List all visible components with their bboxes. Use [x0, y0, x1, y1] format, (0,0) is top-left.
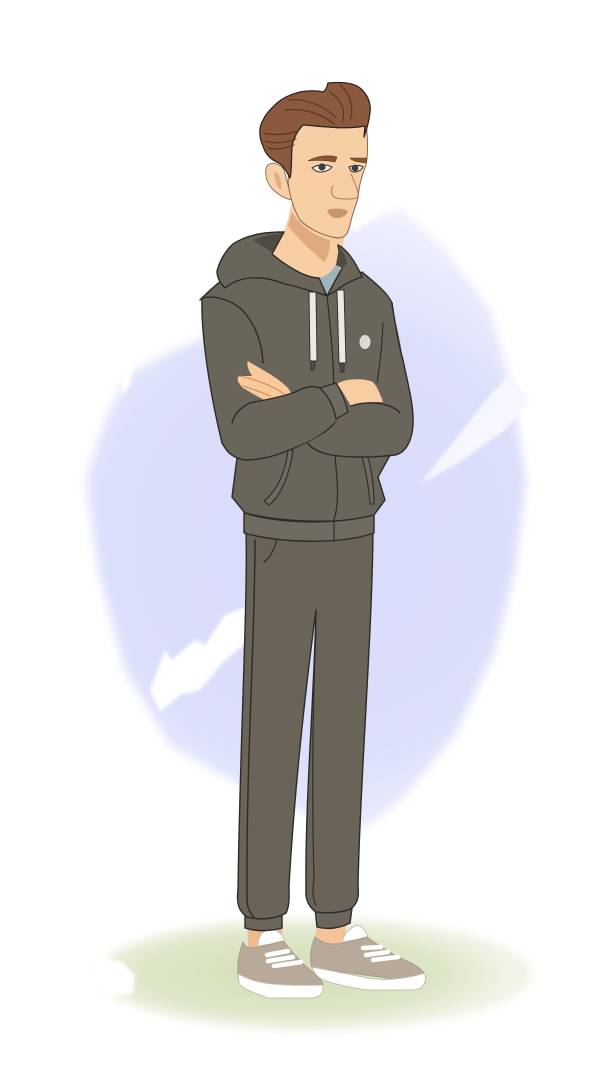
trousers — [237, 530, 373, 931]
ground: green grass patch — [92, 918, 531, 1030]
left foot ankle — [247, 925, 283, 968]
hood inner shadow — [253, 233, 283, 252]
cuff — [320, 383, 348, 419]
brow left — [308, 156, 337, 162]
drawstring: left — [309, 292, 317, 370]
hoodie body — [200, 232, 405, 541]
neck shadow — [288, 212, 330, 262]
figure: man — [200, 83, 426, 998]
forearm: left — [232, 387, 336, 458]
pocket left — [264, 450, 293, 505]
brow right — [350, 158, 367, 163]
face — [288, 120, 368, 238]
mouth — [327, 208, 347, 218]
shoe: left — [238, 929, 323, 998]
forearm top edge — [351, 403, 400, 413]
pocket right — [362, 457, 374, 504]
hand: right — [337, 379, 383, 406]
hand: left fingers — [238, 361, 293, 402]
arm: right (viewer) — [307, 296, 413, 457]
hoodie hem — [244, 513, 374, 541]
drawstring: right — [337, 290, 346, 372]
arm: left (viewer) — [202, 297, 336, 460]
eye right — [349, 165, 363, 172]
ear — [266, 163, 292, 200]
ear inner — [274, 172, 281, 190]
zipper — [327, 296, 338, 541]
eye left — [312, 163, 332, 172]
t-shirt — [316, 264, 340, 296]
nose — [332, 174, 358, 199]
badge — [360, 335, 370, 349]
shoe: right — [311, 925, 426, 990]
neck — [268, 200, 345, 290]
right foot ankle — [314, 925, 346, 945]
hair — [260, 83, 370, 178]
watercolor: blue wash — [86, 185, 530, 828]
hood — [217, 232, 362, 296]
